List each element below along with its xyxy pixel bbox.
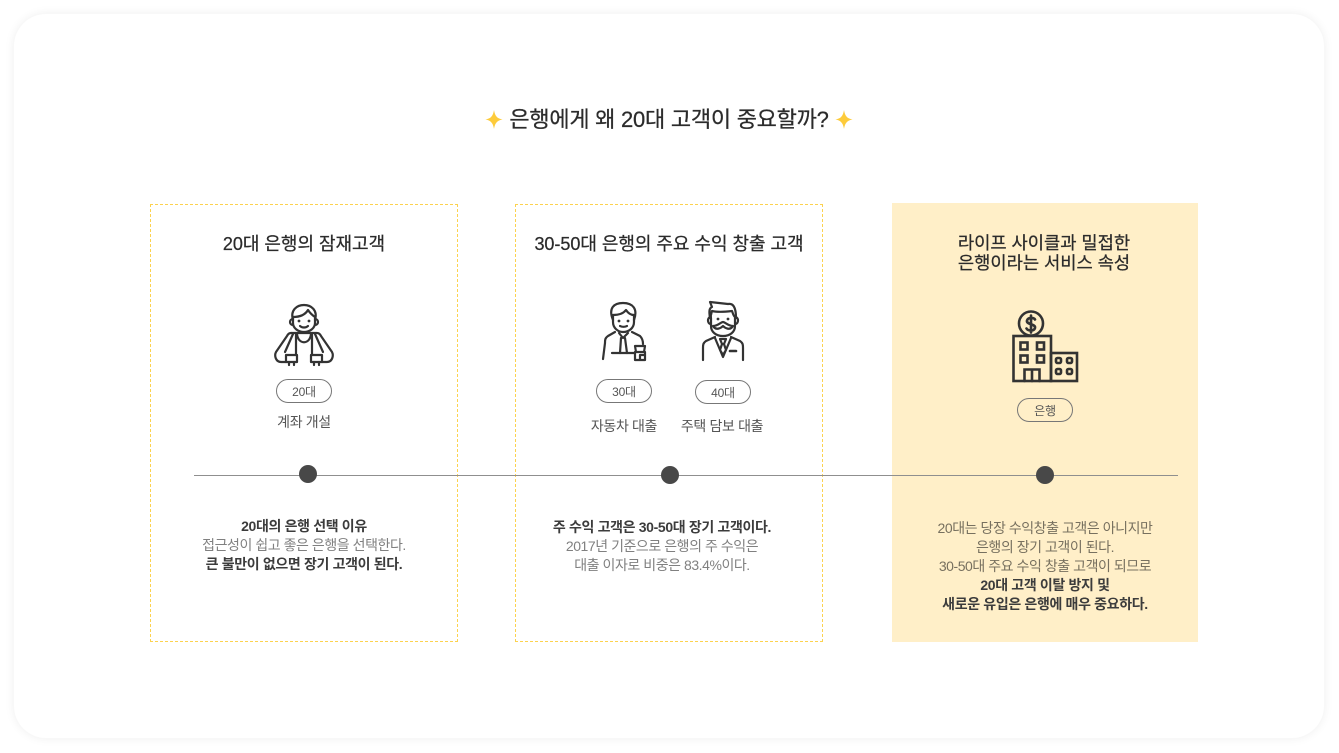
pill: bank: 은행 (1034, 404, 1056, 418)
timeline dot 2 (661, 466, 679, 484)
pill: 20s: 20대 (292, 385, 316, 399)
text block: 20s: 큰 불만이 없으면 장기 고객이 된다. (206, 556, 402, 572)
heading: life cycle: 은행이라는 서비스 속성 (958, 253, 1130, 273)
icon: man in 40s with moustache (702, 300, 744, 362)
panel: 30-50s (515, 204, 823, 642)
text block: 30-50s (553, 519, 771, 573)
pill: 30s (596, 379, 652, 403)
title text: 은행에게 왜 20대 고객이 중요할까? (509, 107, 829, 132)
label: mortgage: 주택 담보 대출 (681, 418, 763, 434)
text block: life cycle: 30-50대 주요 수익 창출 고객이 되므로 (939, 558, 1151, 574)
timeline dot 3 (1036, 466, 1054, 484)
icon: student with backpack (274, 304, 334, 366)
heading: 30-50s: 30-50대 은행의 주요 수익 창출 고객 (534, 234, 804, 254)
text block: 30-50s: 주 수익 고객은 30-50대 장기 고객이다. (553, 519, 771, 535)
text block: life cycle: 새로운 유입은 은행에 매우 중요하다. (942, 596, 1148, 612)
panel: life cycle highlight (892, 203, 1198, 642)
timeline dot 1 (299, 465, 317, 483)
text block: 20s (202, 518, 406, 572)
heading: life cycle (958, 233, 1130, 273)
text block: 30-50s: 대출 이자로 비중은 83.4%이다. (574, 557, 750, 573)
panel: 20s (150, 204, 458, 642)
pill: 20s (276, 379, 332, 403)
heading: life cycle: 라이프 사이클과 밀접한 (958, 233, 1130, 253)
text block: life cycle: 20대는 당장 수익창출 고객은 아니지만 (938, 520, 1152, 536)
heading: 20s: 20대 은행의 잠재고객 (223, 234, 385, 254)
title (486, 107, 852, 132)
pill: 40s: 40대 (711, 386, 735, 400)
text block: 30-50s: 2017년 기준으로 은행의 주 수익은 (566, 538, 758, 554)
pill: 30s: 30대 (612, 385, 636, 399)
timeline (194, 475, 1178, 476)
text block: 20s: 접근성이 쉽고 좋은 은행을 선택한다. (202, 537, 406, 553)
pill: 40s (695, 380, 751, 404)
icon: man in 30s with coffee (602, 302, 646, 362)
icon: left sparkle (486, 110, 502, 129)
icon: bank building with dollar coin (1012, 310, 1078, 382)
pill: bank (1017, 398, 1073, 422)
text block: life cycle (938, 520, 1152, 612)
icon: right sparkle (836, 110, 852, 129)
label: account opening: 계좌 개설 (277, 414, 331, 430)
label: car loan: 자동차 대출 (591, 418, 657, 434)
text block: life cycle: 20대 고객 이탈 방지 및 (980, 577, 1110, 593)
text block: life cycle: 은행의 장기 고객이 된다. (976, 539, 1114, 555)
text block: 20s: 20대의 은행 선택 이유 (241, 518, 367, 534)
